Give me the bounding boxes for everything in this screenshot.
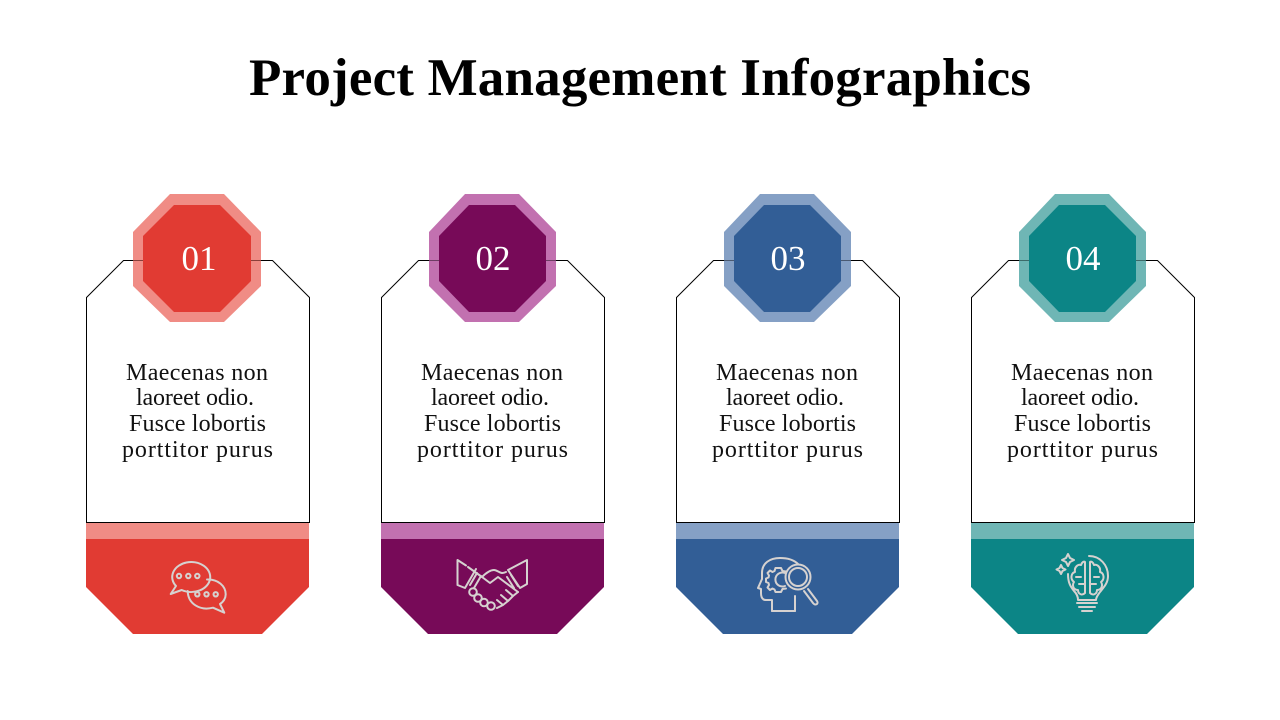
body text 04: porttitor purus — [1007, 437, 1158, 463]
body text 02: Fusce lobortis — [424, 411, 561, 437]
octagon badge 01: 01 — [182, 239, 216, 278]
body text 01 — [122, 360, 273, 463]
light band 03 — [676, 523, 899, 539]
body text 03: Fusce lobortis — [719, 411, 856, 437]
body text 01: Fusce lobortis — [129, 411, 266, 437]
card outline 01 — [86, 260, 310, 522]
body text 03 — [712, 360, 863, 463]
octagon badge 04: 04 — [1066, 239, 1100, 278]
body text 01: porttitor purus — [122, 437, 273, 463]
body text 02: laoreet odio. — [431, 385, 549, 411]
octagon badge 03 — [724, 194, 851, 322]
body text 01: laoreet odio. — [136, 385, 254, 411]
body text 04: Fusce lobortis — [1014, 411, 1151, 437]
icon: light bulb with brain — [1056, 554, 1108, 611]
body text 02 — [417, 360, 568, 463]
card outline 04 — [972, 260, 1194, 522]
body text 02: Maecenas non — [421, 360, 563, 386]
light band 04 — [971, 523, 1194, 539]
dark base 01 — [86, 539, 309, 634]
light band 02 — [381, 523, 604, 539]
body text 02: porttitor purus — [417, 437, 568, 463]
light band 01 — [86, 523, 309, 539]
card outline 03 — [676, 260, 900, 522]
body text 03: Maecenas non — [716, 360, 858, 386]
octagon badge 04 — [1019, 194, 1146, 322]
octagon badge 02 — [429, 194, 556, 322]
panel: card 01 — [86, 194, 310, 634]
body text 01: Maecenas non — [126, 360, 268, 386]
icon: head with gear and magnifier — [758, 558, 818, 611]
body text 03: porttitor purus — [712, 437, 863, 463]
title: Project Management Infographics — [249, 49, 1031, 107]
panel: card 04 — [971, 194, 1194, 634]
octagon badge 03: 03 — [770, 239, 806, 278]
card outline 02 — [382, 260, 604, 522]
octagon badge 02: 02 — [476, 239, 510, 278]
body text 04: Maecenas non — [1011, 360, 1153, 386]
octagon badge 01 — [133, 194, 261, 322]
icon: speech bubbles — [171, 562, 226, 613]
body text 04 — [1007, 360, 1158, 463]
body text 04: laoreet odio. — [1021, 385, 1139, 411]
dark base 03 — [676, 539, 899, 634]
dark base 02 — [381, 539, 604, 634]
body text 03: laoreet odio. — [726, 385, 844, 411]
dark base 04 — [971, 539, 1194, 634]
panel: card 03 — [676, 194, 900, 634]
icon: handshake — [458, 560, 527, 610]
panel: card 02 — [381, 194, 604, 634]
